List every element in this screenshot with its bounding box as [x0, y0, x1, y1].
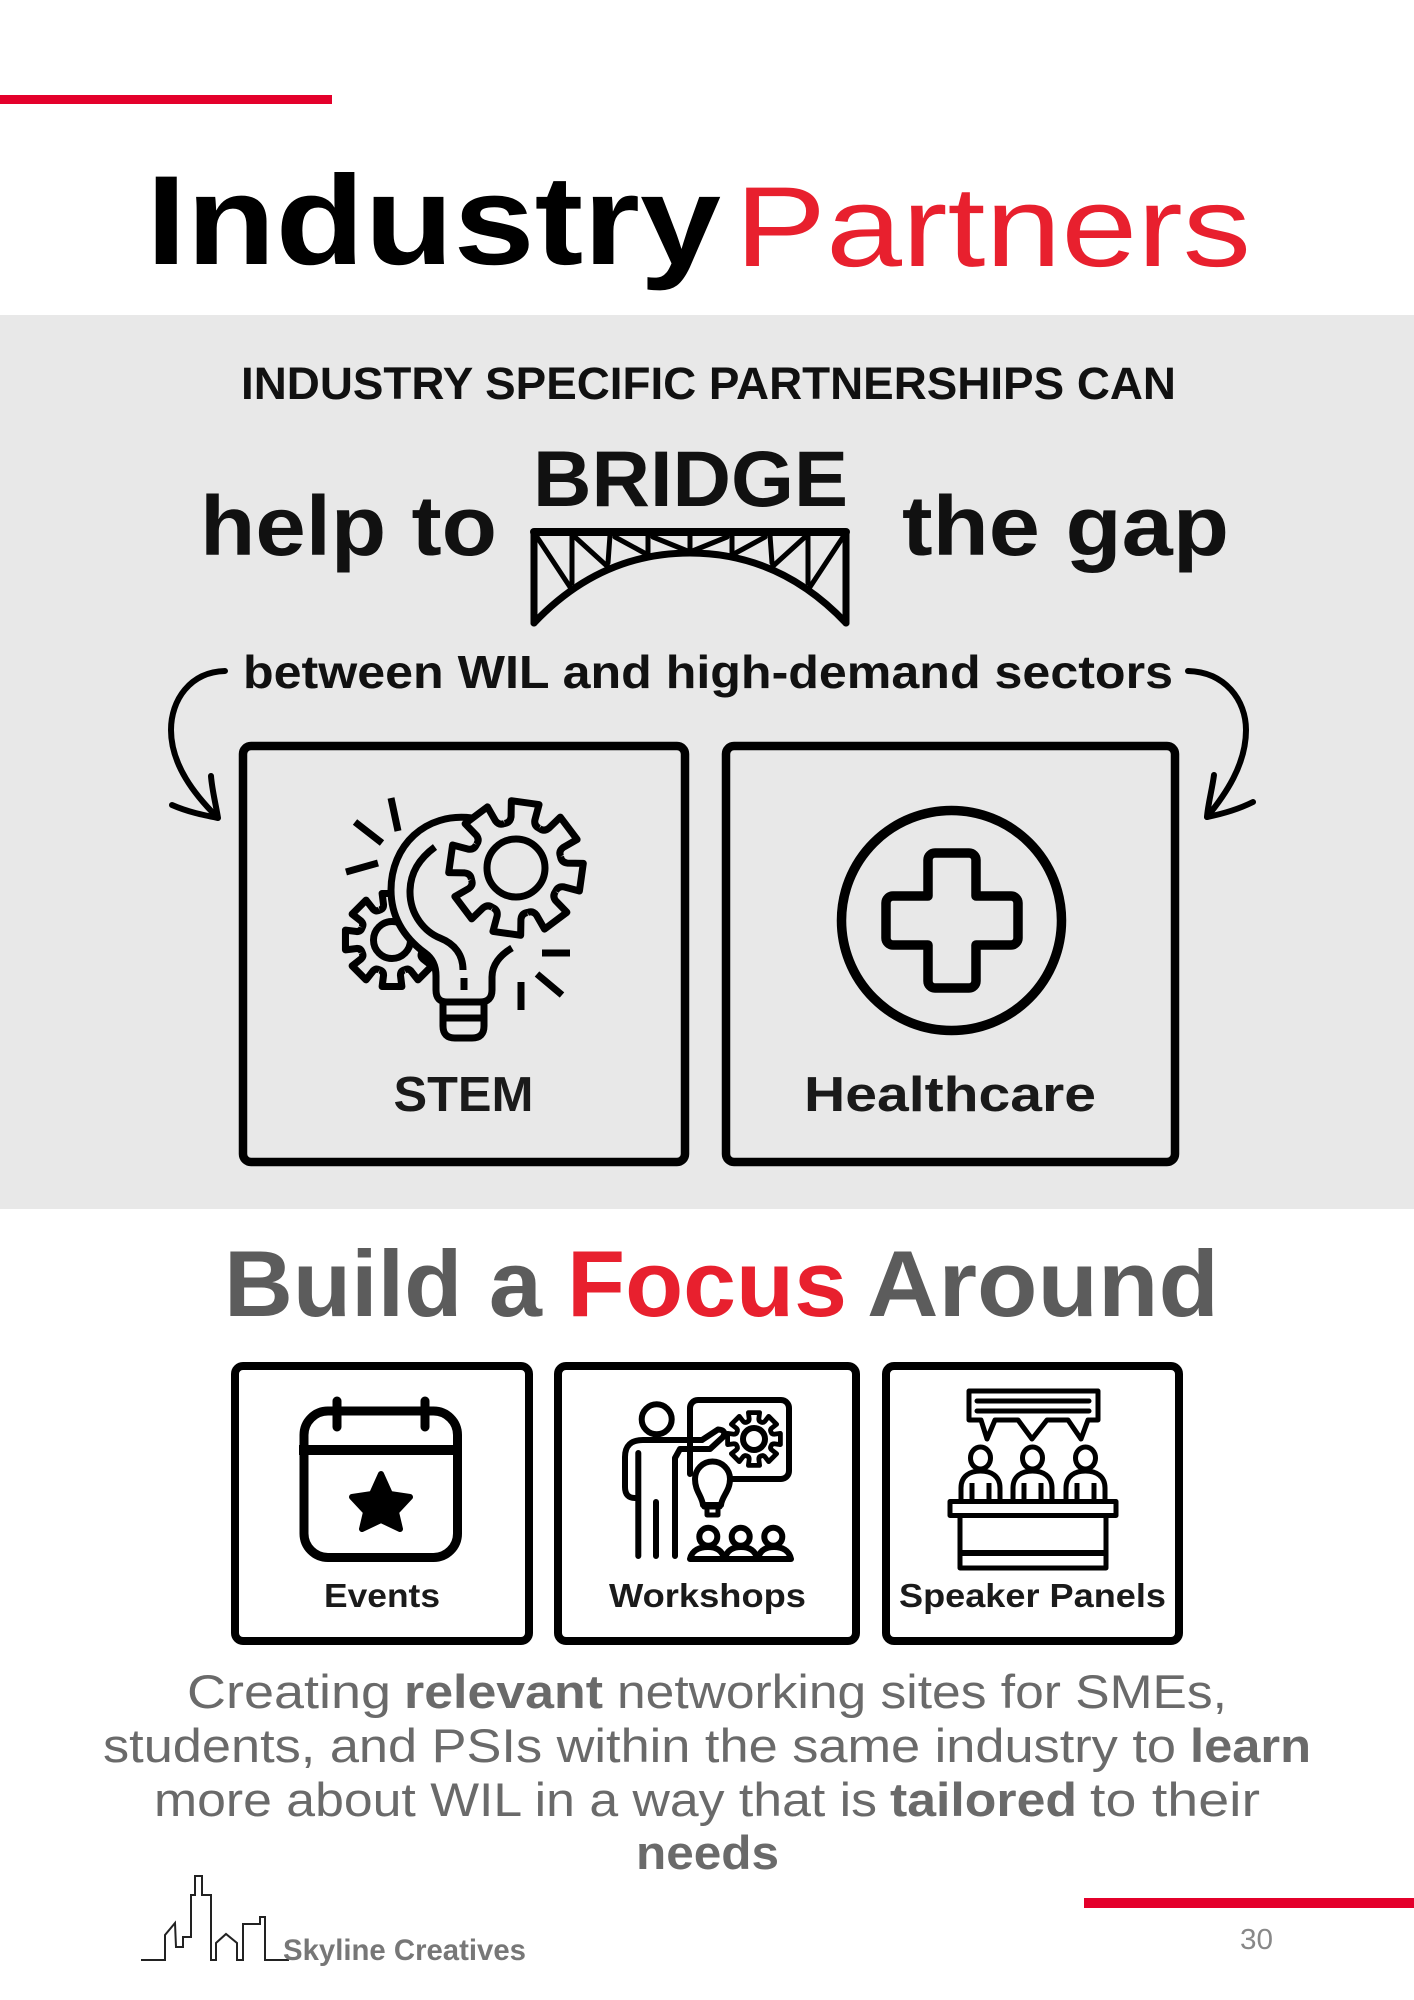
- label: Healthcare: Healthcare: [804, 1068, 1096, 1122]
- panel: STEM card: [243, 746, 685, 1162]
- text: the gap: the gap: [902, 479, 1229, 573]
- label: Events: Events: [324, 1577, 440, 1614]
- panel: grey bridge section: [0, 315, 1414, 1209]
- text: between WIL and high-demand sectors: between WIL and high-demand sectors: [243, 646, 1173, 698]
- icon: panel of speakers at desk: [950, 1391, 1116, 1568]
- text block: description: to their: [1090, 1773, 1260, 1826]
- label: Speaker Panels: Speaker Panels: [899, 1577, 1166, 1614]
- label: Workshops: Workshops: [609, 1577, 806, 1614]
- arrow: left curved: [171, 671, 225, 818]
- panel: Workshops card: [558, 1366, 856, 1641]
- heading: Build a Focus Around: Focus: [567, 1231, 847, 1336]
- text block: description: networking sites for SMEs,: [617, 1665, 1227, 1718]
- icon: calendar with star: [299, 1401, 462, 1558]
- logo: Skyline Creatives: [141, 1876, 526, 1967]
- label: STEM: STEM: [394, 1068, 534, 1122]
- text block: description: [103, 1665, 1311, 1879]
- text block: description: students, and PSIs within the same industry to: [103, 1719, 1176, 1772]
- text block: description: tailored: [890, 1773, 1077, 1826]
- heading: Build a Focus Around: [224, 1231, 1219, 1336]
- text block: description: Creating: [187, 1665, 391, 1718]
- title: [146, 149, 1251, 291]
- arrow: right curved: [1188, 671, 1253, 817]
- text block: description: learn: [1190, 1719, 1311, 1772]
- subheading: INDUSTRY SPECIFIC PARTNERSHIPS CAN: [241, 358, 1176, 409]
- title: Industry: [146, 149, 721, 291]
- heading: Build a Focus Around: Around: [867, 1231, 1219, 1336]
- panel: Healthcare card: [726, 746, 1175, 1162]
- text: help to: help to: [200, 479, 497, 573]
- panel: Speaker Panels card: [886, 1366, 1179, 1641]
- icon: lightbulb with gears: [345, 793, 591, 1038]
- text: BRIDGE: BRIDGE: [533, 434, 848, 523]
- icon: presenter at board: [625, 1400, 791, 1559]
- text block: description: more about WIL in a way that is: [154, 1773, 877, 1826]
- logo text: Skyline Creatives: [283, 1934, 526, 1967]
- heading: Build a Focus Around: Build a: [224, 1231, 543, 1336]
- icon: bridge: [534, 532, 846, 623]
- top red accent bar: [0, 95, 332, 104]
- page number: 30: [1240, 1924, 1273, 1956]
- bottom red accent bar: [1084, 1898, 1414, 1908]
- icon: medical cross in circle: [842, 810, 1062, 1030]
- icon: skyline outline: [141, 1876, 289, 1960]
- title: Partners: [735, 164, 1251, 291]
- text block: description: relevant: [404, 1665, 603, 1718]
- panel: Events card: [235, 1366, 529, 1641]
- text block: description: needs: [636, 1826, 779, 1879]
